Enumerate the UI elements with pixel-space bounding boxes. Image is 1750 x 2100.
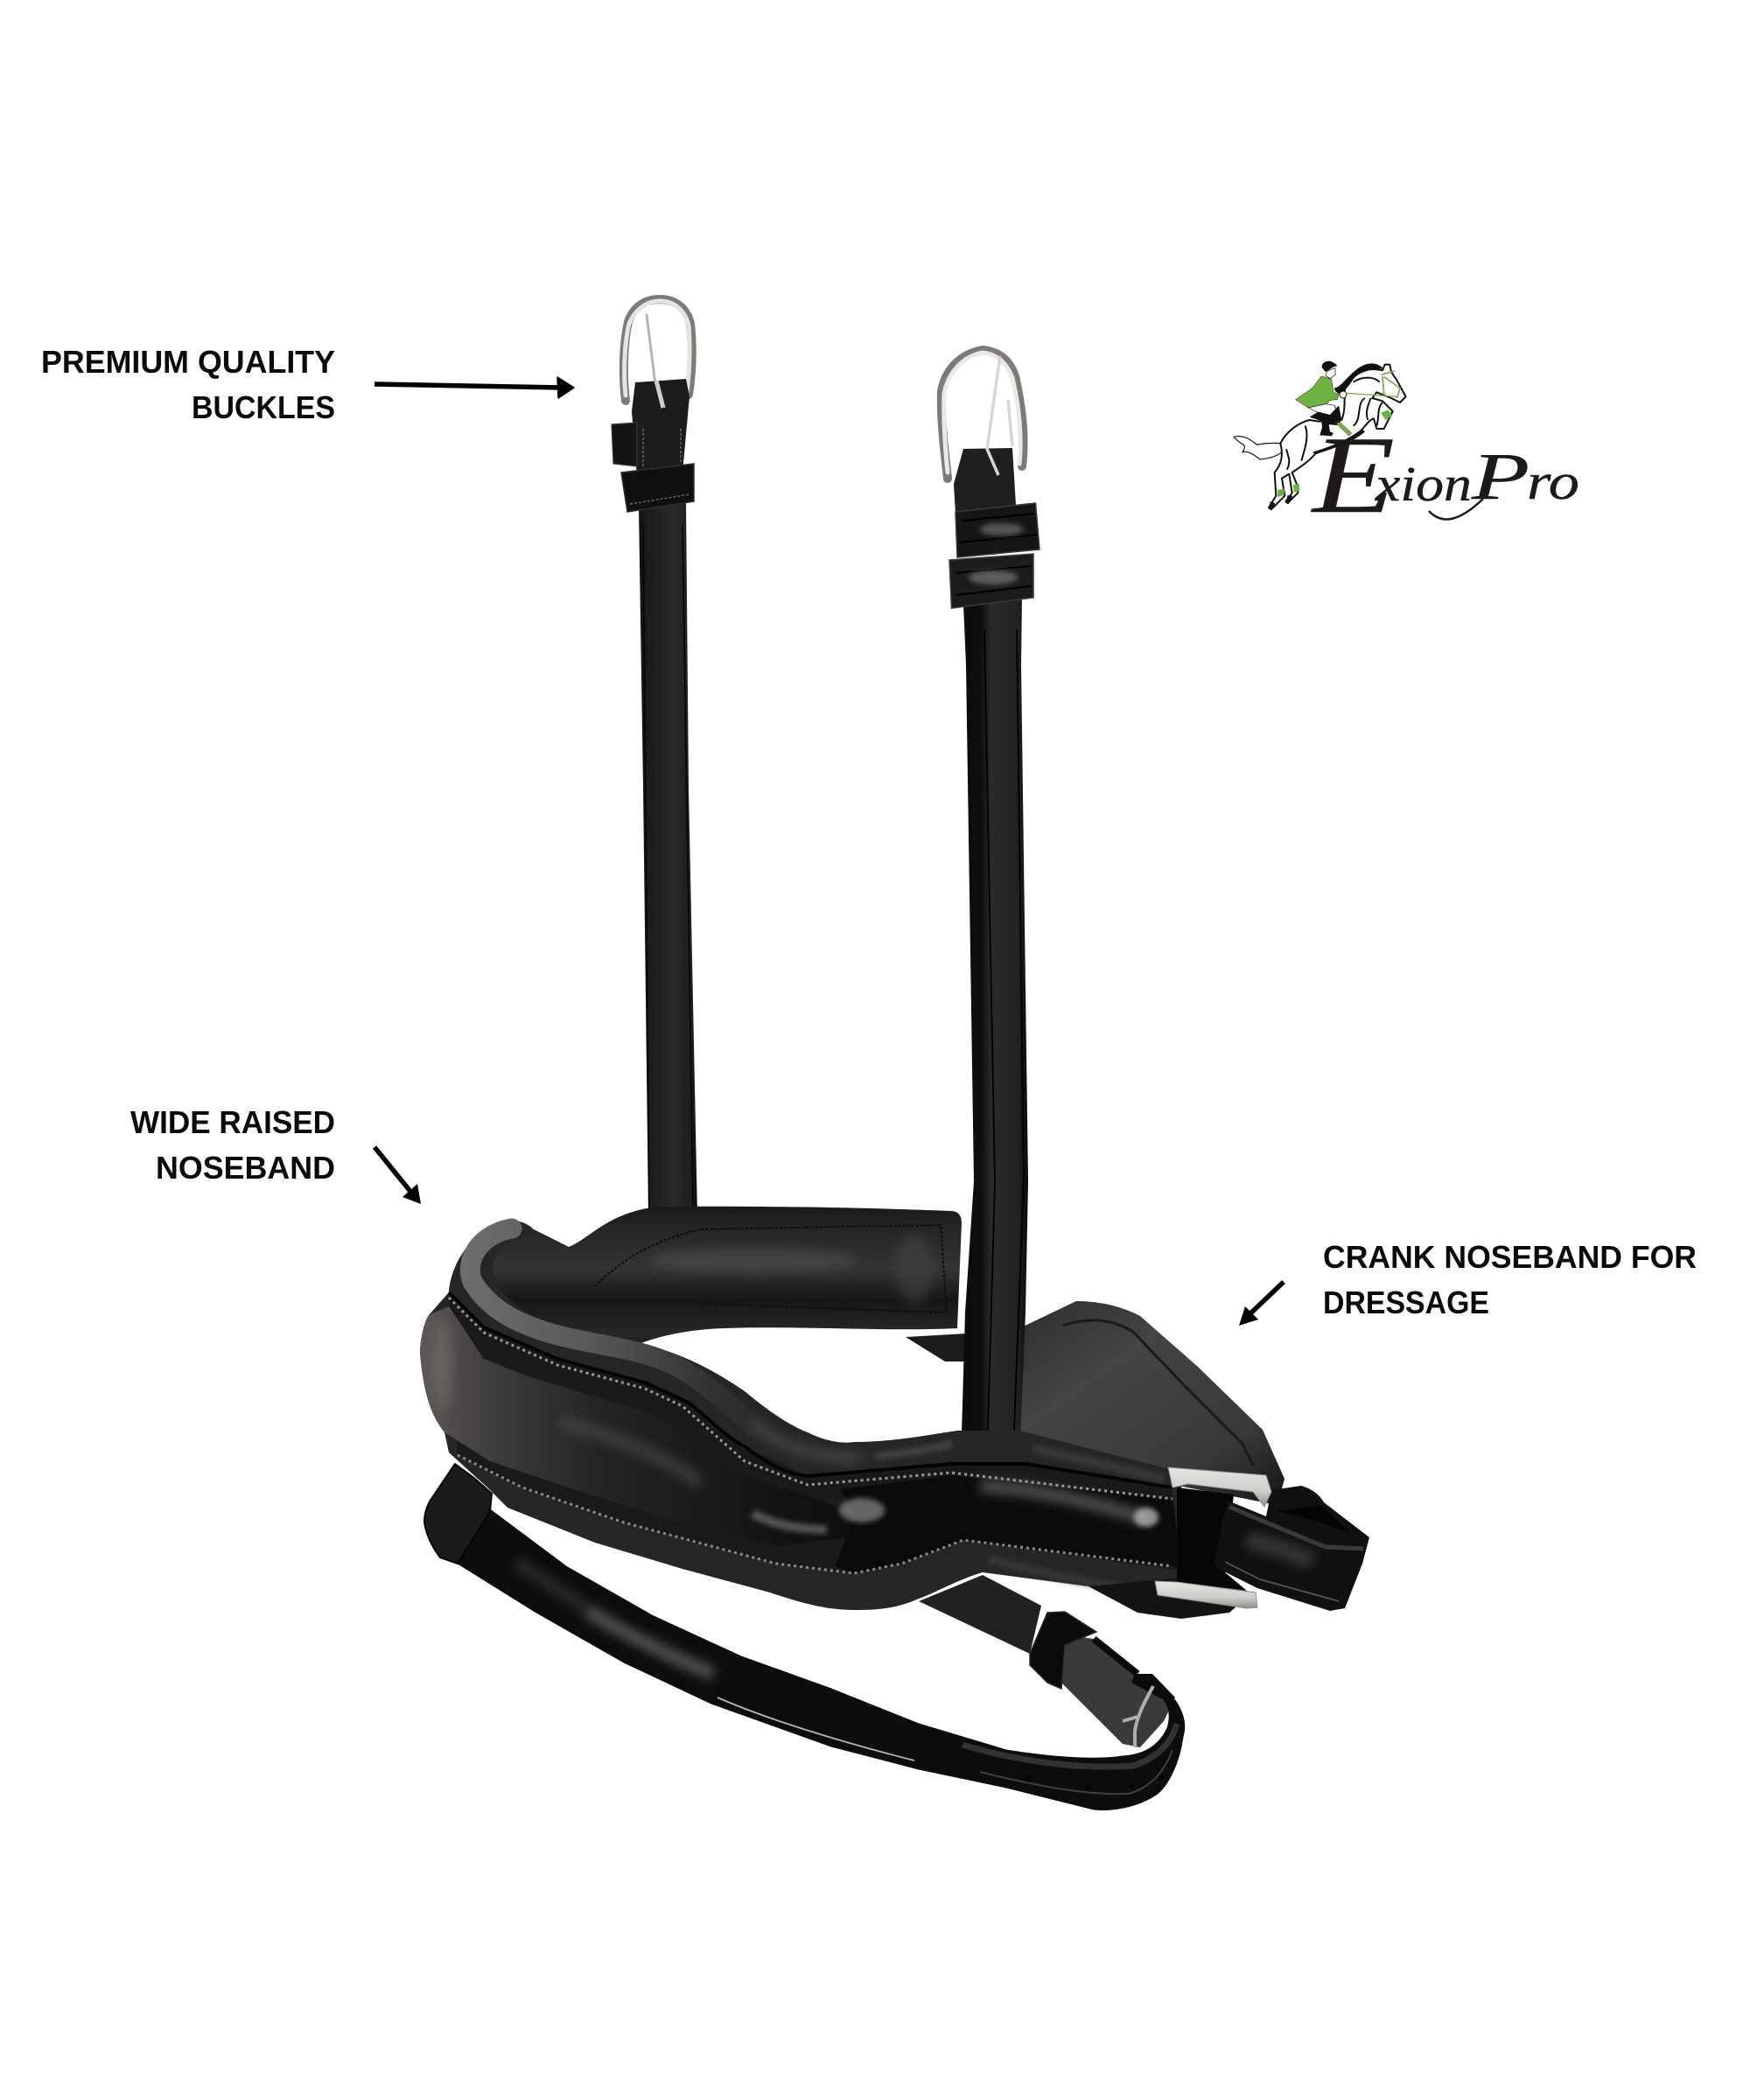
lower chin strap — [424, 1464, 1185, 1810]
tongue edge — [1094, 1639, 1138, 1674]
stitched midsection — [449, 1292, 1181, 1573]
underside below buckle — [1088, 1578, 1242, 1619]
dark line beneath rim — [449, 1292, 1172, 1488]
crank end loop — [1214, 1486, 1369, 1611]
hooves — [1269, 495, 1292, 510]
second adjuster strap — [919, 1575, 1175, 1747]
wordmark middle: xion — [1375, 458, 1472, 512]
label text line 2: BUCKLES — [192, 389, 335, 425]
right buckle — [942, 350, 1024, 479]
left strap keepers — [612, 379, 694, 512]
strap dark centre — [516, 1562, 586, 1608]
product photo: crank noseband — [420, 299, 1369, 1810]
strap lower gloss line — [718, 1698, 914, 1760]
label text line 2: DRESSAGE — [1323, 1284, 1489, 1320]
callout: wide raised noseband — [130, 1104, 421, 1204]
wordmark end letters: ro — [1527, 453, 1579, 510]
right cheek strap — [961, 597, 1028, 1466]
glove — [1340, 391, 1347, 398]
loop bottom edge — [1225, 1562, 1339, 1601]
strap keeper at left — [424, 1464, 492, 1564]
crank flap — [906, 1301, 1284, 1505]
loop sheen — [1247, 1540, 1312, 1562]
arrow — [374, 1147, 421, 1204]
wide raised front band — [420, 1221, 1183, 1610]
mane — [1334, 363, 1384, 394]
label text: PREMIUM QUALITY — [41, 344, 335, 380]
left buckle — [624, 299, 692, 401]
gray rim roll — [470, 1228, 752, 1426]
padding sheen — [648, 1249, 858, 1271]
upper stitching — [449, 1298, 1172, 1499]
glossy centre black panel — [836, 1475, 1181, 1573]
girth — [1336, 423, 1352, 436]
leg wraps — [1278, 410, 1393, 497]
label text: WIDE RAISED — [130, 1104, 335, 1140]
strap rolled top edge — [962, 1724, 1177, 1767]
back padded section — [472, 1207, 962, 1356]
lower square buckle — [1155, 1581, 1257, 1608]
rider jacket — [1296, 376, 1339, 408]
right sheen — [895, 1234, 934, 1304]
left cheek strap — [639, 500, 697, 1216]
rider face — [1326, 368, 1335, 379]
strap edge line — [980, 1750, 1172, 1794]
callout: premium quality buckles — [41, 344, 574, 425]
top square buckle — [1168, 1467, 1271, 1507]
shading lines — [1286, 378, 1382, 470]
strap sheen — [586, 1610, 713, 1674]
label text: CRANK NOSEBAND FOR — [1323, 1239, 1697, 1275]
under bar — [906, 1334, 967, 1362]
wordmark: E — [1311, 415, 1395, 536]
tail — [1234, 437, 1282, 459]
bridle — [1381, 371, 1400, 398]
label text line 2: NOSEBAND — [156, 1150, 335, 1186]
saddle — [1310, 405, 1341, 425]
horse and rider illustration — [1234, 361, 1406, 510]
holes — [1027, 1774, 1164, 1790]
glossy left panel — [420, 1306, 856, 1546]
loop inner shadow — [1278, 1505, 1350, 1533]
horse body — [1269, 365, 1406, 509]
rider breeches — [1308, 404, 1337, 416]
loop top edge — [1229, 1507, 1363, 1549]
gray tongue — [1061, 1634, 1175, 1747]
keeper — [1030, 1612, 1096, 1689]
wordmark end: P — [1471, 440, 1530, 514]
padding stitch line — [595, 1225, 947, 1312]
small strap buckle — [1123, 1686, 1153, 1747]
belly shadow — [1312, 429, 1365, 454]
rein — [1346, 393, 1397, 396]
rider helmet — [1322, 361, 1338, 372]
crank end gap — [1177, 1488, 1247, 1591]
band highlights — [431, 1321, 1164, 1592]
right strap keepers — [949, 356, 1040, 608]
wordmark flourish — [1429, 499, 1483, 519]
lower stitching — [458, 1455, 1172, 1573]
arrow — [374, 377, 574, 398]
logo: ExionPro — [1234, 361, 1579, 536]
tip keeper — [1131, 1674, 1175, 1704]
arrow — [1239, 1282, 1284, 1326]
boot — [1320, 418, 1334, 436]
callout: crank noseband for dressage — [1239, 1239, 1697, 1326]
